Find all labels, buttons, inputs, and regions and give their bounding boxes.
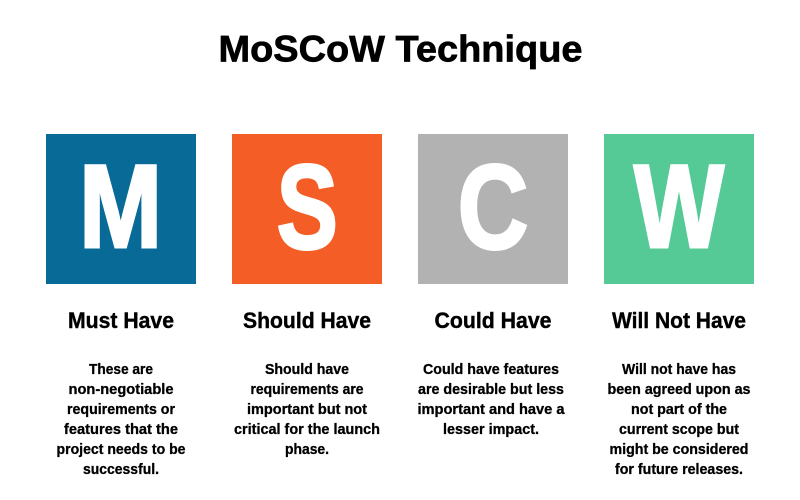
icon: S tile: S xyxy=(277,141,338,275)
text block: Should Have description: requirements are xyxy=(250,382,364,398)
text block: Will Not Have description: been agreed upon as xyxy=(608,382,750,398)
text block: Must Have description: non-negotiable xyxy=(68,382,174,398)
panel: Will Not Have xyxy=(604,134,754,478)
heading: Should Have: Should Have xyxy=(243,308,371,333)
text block: Should Have description: phase. xyxy=(285,442,329,458)
text block: Will Not Have description: Will not have has xyxy=(622,362,736,378)
panel: Could Have xyxy=(418,134,568,438)
text block: Should Have description: important but not xyxy=(247,402,367,418)
icon: C tile: C xyxy=(458,141,528,275)
icon: M tile: M xyxy=(79,141,162,273)
text block: Will Not Have description: current scope but xyxy=(619,422,739,438)
text block: Could Have description: important and have a xyxy=(418,402,565,418)
icon: S tile xyxy=(232,134,382,284)
text block: Must Have description: features that the xyxy=(64,422,178,438)
icon: M tile xyxy=(46,134,196,284)
text block: Must Have description: successful. xyxy=(83,462,159,478)
text block: Must Have description: These are xyxy=(89,362,153,378)
icon: W tile: W xyxy=(634,141,725,273)
text block: Could Have description xyxy=(418,362,565,438)
text block: Could Have description: are desirable but less xyxy=(418,382,564,398)
panel: Should Have xyxy=(232,134,382,458)
text block: Should Have description xyxy=(234,362,380,458)
icon: C tile xyxy=(418,134,568,284)
text block: Should Have description: Should have xyxy=(265,362,349,378)
text block: Will Not Have description: might be considered xyxy=(610,442,748,458)
heading: Will Not Have: Will Not Have xyxy=(612,308,746,333)
text block: Should Have description: critical for the launch xyxy=(234,422,380,438)
heading: Must Have: Must Have xyxy=(68,308,174,333)
text block: Will Not Have description xyxy=(608,362,750,478)
text block: Will Not Have description: for future releases. xyxy=(615,462,743,478)
title: MoSCoW Technique xyxy=(218,28,582,70)
text block: Must Have description xyxy=(56,362,186,478)
text block: Could Have description: Could have features xyxy=(423,362,559,378)
text block: Must Have description: project needs to be xyxy=(56,442,186,458)
panel: Must Have xyxy=(46,134,196,478)
text block: Could Have description: lesser impact. xyxy=(443,422,539,438)
icon: W tile xyxy=(604,134,754,284)
text block: Must Have description: requirements or xyxy=(67,402,175,418)
heading: Could Have: Could Have xyxy=(434,308,552,333)
text block: Will Not Have description: not part of the xyxy=(631,402,727,418)
